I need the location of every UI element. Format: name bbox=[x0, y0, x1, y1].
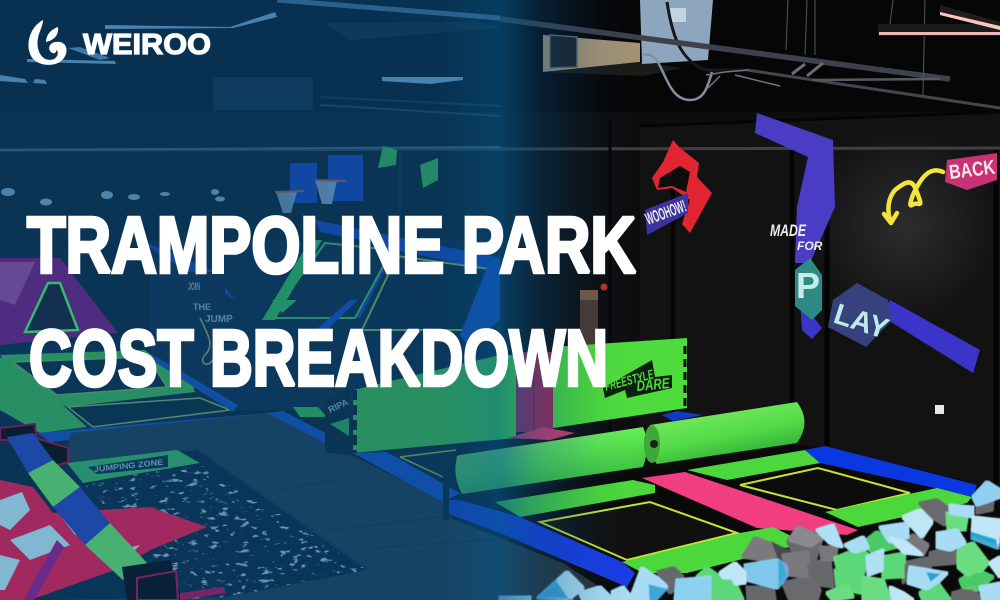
pad: pink divider bbox=[642, 472, 858, 535]
yellow squiggle arrow bbox=[884, 170, 943, 223]
pendant lights bbox=[878, 5, 1000, 36]
join the jump sign: JUMP bbox=[205, 314, 233, 325]
join the jump sign: JOIN bbox=[188, 281, 200, 293]
wall graphic: purple stripe bbox=[755, 113, 980, 373]
green foam roller right bbox=[644, 402, 804, 464]
trampoline bed: left bbox=[540, 502, 737, 560]
green wall graphics far side bbox=[378, 146, 438, 188]
pad: green right bbox=[825, 488, 972, 527]
foam pit cubes bbox=[500, 482, 1000, 600]
far trampoline bays bbox=[140, 220, 500, 410]
join the jump sign: THE bbox=[193, 302, 211, 312]
dome lights on far wall bbox=[1, 188, 225, 206]
logo wordmark: WEIROO bbox=[83, 29, 211, 61]
wall graphic: made for play: FOR bbox=[797, 239, 823, 253]
green crash wall: RIPA bbox=[327, 397, 350, 415]
pink pillar bbox=[508, 352, 575, 440]
pad: green upper right bbox=[687, 450, 820, 480]
title line 1: TRAMPOLINE PARK bbox=[27, 200, 636, 290]
wall graphic: made for play: LAY bbox=[830, 298, 892, 346]
pad: green upper left bbox=[495, 480, 655, 517]
wall graphic: made for play bbox=[770, 221, 892, 347]
ceiling with ducts and lights bbox=[0, 0, 1000, 116]
mat green banner: JUMPING ZONE bbox=[93, 458, 165, 474]
blue pad beside green wall bbox=[267, 411, 325, 443]
mat red print bbox=[0, 480, 207, 600]
freestyle dare crash mat: DARE bbox=[636, 375, 671, 395]
join the jump sign bbox=[150, 272, 290, 405]
near-left trampolines bbox=[0, 345, 327, 442]
foreground padded beam bbox=[0, 424, 226, 600]
purple tube bbox=[23, 540, 64, 600]
purple wedge obstacle bbox=[0, 258, 118, 345]
green foam roller left bbox=[455, 427, 647, 494]
trampoline bed: right bbox=[740, 468, 910, 510]
freestyle dare crash mat bbox=[553, 338, 703, 428]
wall graphic: woohow: WOOHOW! bbox=[643, 197, 689, 229]
logo mark bbox=[28, 20, 67, 65]
wall graphic: woohow bbox=[643, 140, 712, 235]
wall graphic: made for play: P bbox=[796, 265, 820, 306]
basketball hoops bbox=[275, 155, 363, 213]
printed jumping mat bbox=[30, 450, 370, 600]
floor seams bbox=[195, 448, 560, 570]
safety net rails and poles bbox=[0, 112, 1000, 500]
mat green banner bbox=[67, 450, 200, 483]
pad: blue back edge bbox=[805, 446, 977, 497]
rubber floor bbox=[50, 413, 640, 600]
title bbox=[27, 200, 636, 402]
pad: green bottom bbox=[622, 527, 793, 573]
title line 2: COST BREAKDOWN bbox=[29, 314, 608, 402]
green crash wall bbox=[325, 355, 516, 502]
wall fixtures and switch bbox=[580, 284, 944, 414]
trampoline court base bbox=[462, 445, 1000, 600]
pad: blue left edge bbox=[443, 500, 635, 587]
freestyle dare crash mat: FREESTYLE bbox=[603, 366, 655, 394]
logo bbox=[28, 20, 211, 65]
wall graphic: made for play: MADE bbox=[770, 221, 806, 240]
roller stand bbox=[443, 470, 462, 520]
